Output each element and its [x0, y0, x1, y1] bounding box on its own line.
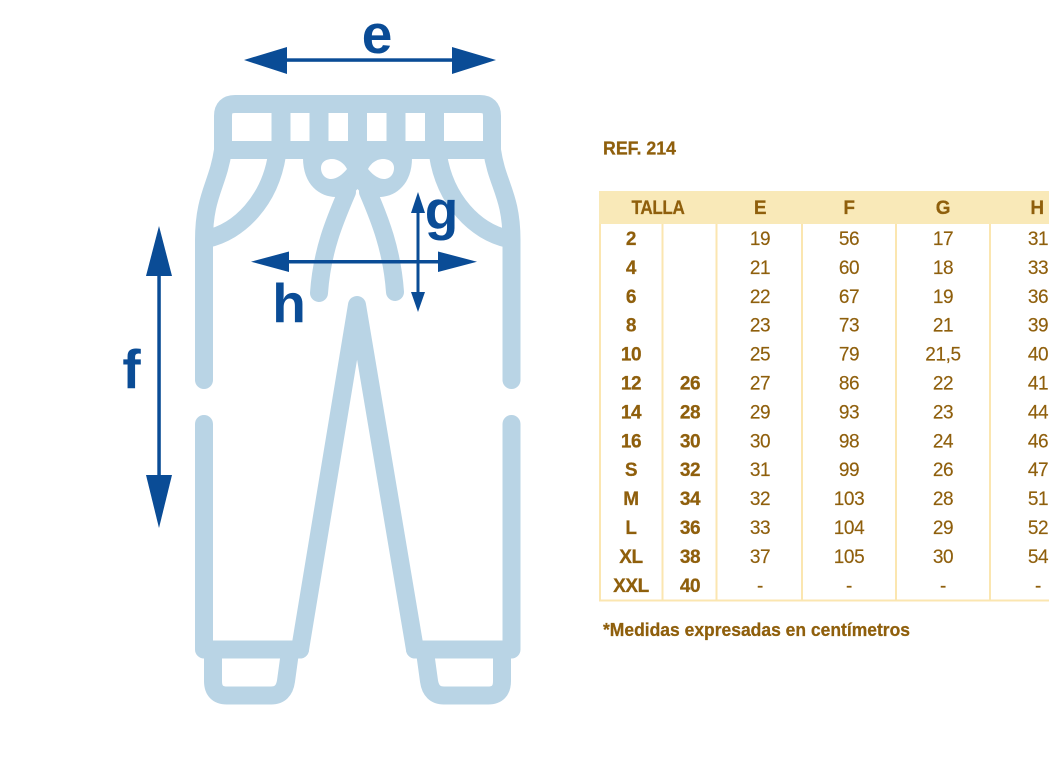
column: F: 104: [834, 518, 865, 539]
column: H: 51: [1028, 489, 1048, 510]
right cuff: [425, 652, 502, 696]
column: G: 30: [933, 547, 953, 568]
column: E: 33: [750, 518, 770, 539]
size table: [599, 191, 1049, 600]
column: sizes: L: [625, 518, 637, 539]
label e: e: [362, 3, 392, 65]
column: F: 105: [834, 547, 864, 568]
column: sizes: 14: [621, 402, 642, 423]
column: F: 67: [839, 287, 859, 308]
column: G: 21,5: [925, 345, 961, 366]
arrow f: [146, 226, 172, 528]
column: sizes: 10: [621, 345, 641, 366]
left cuff: [213, 652, 290, 696]
column: G: 29: [933, 518, 953, 539]
column: E: 32: [750, 489, 770, 510]
left pocket: [206, 155, 277, 239]
right knot hole: [368, 159, 394, 179]
column: H: 47: [1028, 460, 1048, 481]
table header: G: [936, 198, 950, 219]
column: sizes: 4: [626, 258, 637, 279]
waistband: [223, 104, 492, 150]
column: alternate sizes: 26: [680, 374, 700, 394]
footnote: *Medidas expresadas en centímetros: [603, 620, 910, 640]
column: G: 28: [933, 489, 953, 510]
column: E: 25: [750, 345, 770, 366]
left side seam upper: [204, 150, 223, 380]
column: H: 36: [1028, 287, 1048, 308]
column: H: 40: [1028, 345, 1048, 366]
column: E: [750, 229, 770, 597]
column: sizes: 6: [626, 287, 636, 308]
column: F: 98: [839, 431, 859, 452]
column: E: 31: [750, 460, 770, 481]
column: G: 23: [933, 402, 953, 423]
column: F: 86: [839, 374, 859, 394]
column: F: 56: [839, 229, 859, 250]
column: H: 54: [1028, 547, 1049, 568]
label f: f: [122, 338, 141, 400]
table header: [599, 191, 1049, 224]
column: alternate sizes: 38: [680, 547, 700, 568]
column: sizes: XL: [619, 547, 644, 568]
column: H: 39: [1028, 316, 1048, 337]
column: sizes: 16: [621, 431, 641, 452]
column: H: -: [1035, 576, 1041, 597]
column: G: 26: [933, 460, 953, 481]
column: F: 103: [834, 489, 864, 510]
column: alternate sizes: [680, 374, 701, 597]
column: F: 73: [839, 316, 859, 337]
column: H: 52: [1028, 518, 1048, 539]
left drawstring: [319, 192, 347, 293]
column: H: [1028, 229, 1049, 597]
column: sizes: 2: [626, 229, 636, 250]
table header: F: [843, 198, 855, 219]
column: sizes: M: [623, 489, 639, 510]
column: F: 60: [839, 258, 859, 279]
column: H: 31: [1028, 229, 1048, 250]
column: H: 44: [1028, 402, 1049, 423]
arrow e: [244, 47, 496, 74]
column: E: 37: [750, 547, 770, 568]
column: alternate sizes: 36: [680, 518, 700, 539]
column: G: 24: [933, 431, 954, 452]
column: E: 22: [750, 287, 770, 308]
column: sizes: [613, 229, 650, 597]
column: H: 46: [1028, 431, 1048, 452]
label h: h: [272, 272, 306, 334]
left leg outer seam: [204, 424, 300, 650]
column: H: 33: [1028, 258, 1048, 279]
column: H: 41: [1028, 374, 1048, 394]
inseam: [300, 305, 415, 650]
column: E: 21: [750, 258, 770, 279]
column: sizes: S: [625, 460, 637, 481]
column: F: 99: [839, 460, 859, 481]
column: F: -: [846, 576, 852, 597]
column: F: 79: [839, 345, 859, 366]
column: E: 19: [750, 229, 770, 250]
column: alternate sizes: 30: [680, 431, 700, 452]
column: alternate sizes: 34: [680, 489, 701, 510]
column: G: [925, 229, 961, 597]
arrow h: [251, 252, 477, 272]
column: E: 23: [750, 316, 770, 337]
column: G: -: [940, 576, 946, 597]
column: G: 19: [933, 287, 953, 308]
table header: H: [1030, 198, 1044, 219]
column: G: 22: [933, 374, 953, 394]
column: G: 18: [933, 258, 953, 279]
arrow g: [411, 192, 425, 312]
pants illustration: [204, 104, 512, 696]
reference title: REF. 214: [603, 138, 676, 158]
column: G: 17: [933, 229, 953, 250]
column: alternate sizes: 32: [680, 460, 700, 481]
column: alternate sizes: 40: [680, 576, 700, 597]
column: E: 29: [750, 402, 770, 423]
column: F: 93: [839, 402, 859, 423]
table header: TALLA: [632, 198, 685, 219]
label g: g: [425, 179, 458, 241]
table grid: [600, 224, 1049, 600]
column: E: 27: [750, 374, 770, 394]
column: sizes: 12: [621, 374, 641, 394]
left knot hole: [321, 159, 347, 179]
right leg outer seam: [415, 424, 512, 650]
right side seam upper: [492, 150, 512, 380]
right pocket: [438, 155, 509, 239]
drawstring knot: [303, 158, 412, 197]
table header: E: [754, 198, 766, 219]
column: sizes: XXL: [613, 576, 650, 597]
column: E: -: [757, 576, 763, 597]
column: E: 30: [750, 431, 770, 452]
column: F: [834, 229, 865, 597]
right drawstring: [368, 192, 395, 292]
column: alternate sizes: 28: [680, 402, 700, 423]
column: G: 21: [933, 316, 953, 337]
column: sizes: 8: [626, 316, 636, 337]
